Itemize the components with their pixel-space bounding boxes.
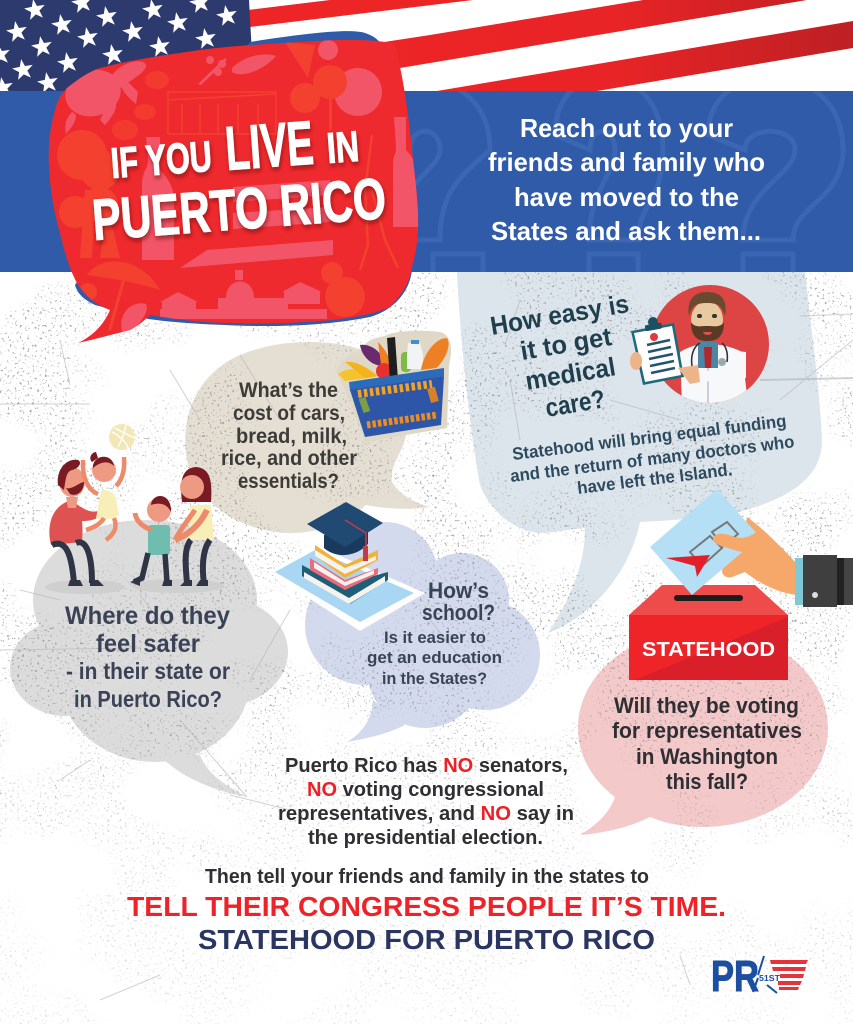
american flag header	[0, 0, 853, 99]
speech bubble: safety (gray cloud)	[10, 520, 288, 797]
title text: IF YOU	[109, 133, 213, 188]
son	[130, 496, 172, 586]
call to action: Then tell your friends and family in the states to	[205, 866, 649, 888]
banner text: friends and family who	[488, 147, 765, 177]
tropical fish	[112, 71, 169, 140]
icon: family playing	[45, 424, 224, 594]
call to action: STATEHOOD FOR PUERTO RICO	[198, 924, 655, 955]
icon: ballot box with hand: STATEHOOD	[642, 639, 775, 661]
medical question text: care?	[543, 383, 607, 423]
puerto rico flag	[180, 180, 333, 268]
clipboard	[630, 317, 700, 385]
logo: PR 51st: 51ST	[759, 973, 781, 983]
logo: PR 51st: PR	[711, 952, 759, 1001]
hibiscus flowers	[318, 40, 338, 60]
icon: ballot box with hand	[629, 489, 853, 680]
medical statement text: have left the Island.	[576, 459, 733, 498]
sleeve and hand	[722, 517, 853, 607]
daughter	[83, 452, 124, 540]
banner text	[488, 113, 765, 246]
representation statement: the presidential election.	[308, 827, 543, 849]
school question text: in the States?	[382, 669, 487, 688]
historic building	[168, 92, 276, 134]
medical statement text: Statehood will bring equal funding	[511, 410, 787, 464]
groceries question text: cost of cars,	[233, 402, 345, 425]
medical question text: it to get	[518, 321, 614, 366]
medical statement text	[509, 410, 795, 498]
parrot	[121, 303, 147, 335]
banner text: Reach out to your	[520, 113, 733, 143]
beach umbrella	[87, 261, 160, 290]
ballot box front	[629, 615, 788, 680]
school question text: school?	[422, 600, 495, 625]
speech bubble: school (lavender cloud)	[305, 522, 540, 742]
speech bubble: groceries (beige)	[185, 342, 430, 533]
icon: grocery basket	[336, 331, 451, 442]
icon: doctor with clipboard	[630, 285, 769, 404]
representation statement: Puerto Rico has NO senators,	[285, 755, 568, 777]
representation statement	[278, 755, 574, 849]
ground shadows	[45, 580, 125, 594]
groceries question text: rice, and other	[221, 447, 357, 470]
father	[49, 460, 104, 586]
medical question text: How easy is	[488, 288, 631, 341]
representation statement: NO voting congressional	[307, 779, 544, 801]
banner text: have moved to the	[514, 182, 739, 212]
sun and palm	[334, 68, 382, 116]
grunge overlay scratches	[0, 300, 853, 1000]
groceries question text: What’s the	[239, 379, 338, 402]
red title speech bubble	[49, 31, 418, 343]
voting question text: in Washington	[636, 744, 778, 769]
safety question text	[65, 602, 230, 712]
background grunge texture	[0, 272, 853, 1024]
logo: PR 51st	[711, 952, 808, 1001]
title text: PUERTO RICO	[90, 166, 388, 253]
title text: IN	[325, 123, 361, 173]
voting question text: for representatives	[612, 718, 802, 743]
ballot paper	[650, 489, 765, 595]
blue banner	[0, 91, 853, 272]
turtle	[60, 61, 146, 134]
representation statement: representatives, and NO say in	[278, 803, 574, 825]
speech bubble: voting (pink)	[578, 629, 828, 835]
ballot box lid	[629, 585, 788, 615]
trees	[57, 130, 120, 258]
flag stripes	[248, 0, 853, 91]
school question text: Is it easier to	[384, 628, 486, 647]
title text: LIVE	[223, 109, 316, 184]
puerto rico icon silhouettes	[57, 40, 418, 335]
call to action: TELL THEIR CONGRESS PEOPLE IT’S TIME.	[127, 891, 726, 922]
voting question text: Will they be voting	[614, 693, 799, 718]
coffee branch and leaf	[198, 54, 276, 85]
blue bubble shadow	[75, 31, 412, 326]
voting question text: this fall?	[666, 769, 748, 794]
safety question text: feel safer	[96, 630, 200, 658]
groceries question text	[221, 379, 357, 493]
groceries question text: essentials?	[238, 470, 339, 493]
call to action	[127, 866, 726, 955]
safety question text: - in their state or	[66, 658, 230, 684]
ball	[109, 424, 135, 450]
speech bubble: medical care (pale blue)	[457, 272, 822, 633]
medical statement text: and the return of many doctors who	[509, 431, 795, 486]
school question text: get an education	[367, 648, 502, 667]
groceries question text: bread, milk,	[236, 425, 347, 448]
icon: books and graduation cap on tablet	[268, 502, 425, 631]
school question text	[367, 578, 502, 688]
capitol building	[160, 270, 327, 319]
safety question text: in Puerto Rico?	[74, 686, 222, 712]
medical question text	[488, 288, 631, 423]
voting question text	[612, 693, 802, 794]
banner text: States and ask them...	[491, 216, 761, 246]
school question text: How’s	[428, 578, 489, 603]
medical question text: medical	[523, 351, 618, 396]
dancer outline	[360, 135, 398, 270]
hot sauce bottles	[142, 117, 418, 260]
safety question text: Where do they	[65, 602, 230, 630]
flag canton with stars	[0, 0, 254, 99]
mother	[175, 467, 214, 586]
red bubble body	[49, 40, 418, 343]
title text	[90, 109, 388, 253]
